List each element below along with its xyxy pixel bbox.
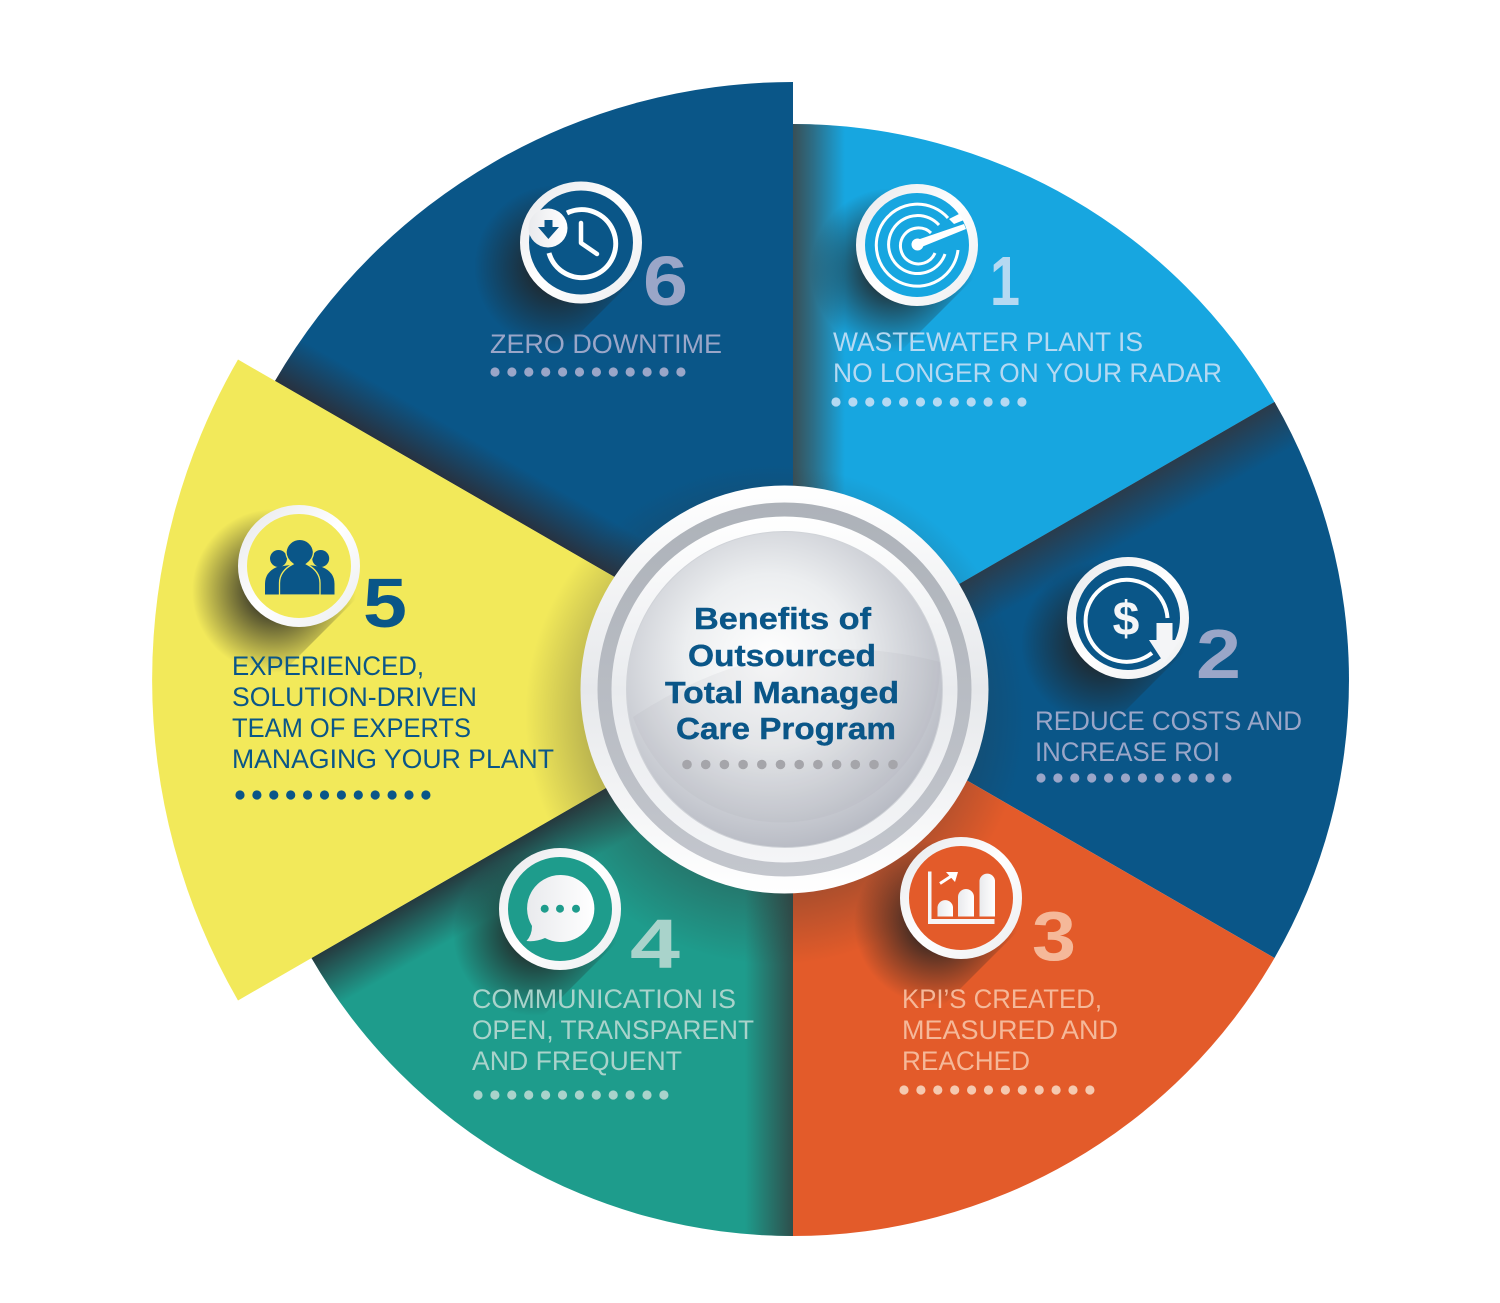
label 5 <box>232 651 554 774</box>
label 5: TEAM OF EXPERTS <box>232 713 471 743</box>
number 1: 1 <box>990 242 1020 320</box>
centre title: Total Managed <box>665 675 899 710</box>
wedge 3 <box>793 680 1274 1236</box>
dots 1 <box>831 397 1026 407</box>
panel: segment 2 reduce costs <box>959 402 1349 958</box>
label 3 <box>902 984 1118 1076</box>
label 3: KPI’S CREATED, <box>902 984 1102 1014</box>
icon: dollar with down arrow <box>1021 561 1185 725</box>
label 4: AND FREQUENT <box>472 1046 682 1076</box>
label 5: MANAGING YOUR PLANT <box>232 744 554 774</box>
centre title: Outsourced <box>688 638 876 673</box>
wedge 6 <box>275 82 793 680</box>
dots 2 <box>1036 773 1232 783</box>
panel: segment 3 KPIs <box>793 780 1274 1236</box>
label 5: SOLUTION-DRIVEN <box>232 682 477 712</box>
number 6: 6 <box>643 242 688 320</box>
centre dots <box>682 760 898 769</box>
panel: segment 4 communication <box>312 788 793 1236</box>
centre title <box>665 601 899 746</box>
disc rims <box>580 486 988 894</box>
icon: chat bubble <box>453 852 617 1016</box>
label 1: NO LONGER ON YOUR RADAR <box>833 358 1222 388</box>
wedge 4 <box>312 680 793 1236</box>
panel: segment 5 experienced team <box>152 360 614 1000</box>
number 4: 4 <box>630 905 680 983</box>
label 4: COMMUNICATION IS <box>472 984 736 1014</box>
panel: centre disc <box>580 486 988 894</box>
icon: radar <box>810 188 974 352</box>
wedge 5 <box>152 360 793 1000</box>
dots 4 <box>473 1090 668 1100</box>
centre title: Care Program <box>676 711 896 746</box>
icon: dollar with down arrow: $ <box>1113 593 1140 646</box>
label 2: INCREASE ROI <box>1035 737 1220 767</box>
dots 3 <box>899 1085 1094 1095</box>
label 6: ZERO DOWNTIME <box>490 329 722 359</box>
centre title: Benefits of <box>694 601 872 636</box>
label 3: REACHED <box>902 1046 1030 1076</box>
dots 5 <box>235 790 430 800</box>
infographic: benefits wheel <box>152 82 1349 1236</box>
icon: clock with down arrow <box>474 185 638 349</box>
wedge 1 <box>793 124 1274 680</box>
number 5: 5 <box>363 564 407 642</box>
label 2 <box>1035 706 1302 767</box>
label 1: WASTEWATER PLANT IS <box>833 327 1143 357</box>
icon: team of people <box>192 509 356 673</box>
label 2: REDUCE COSTS AND <box>1035 706 1302 736</box>
label 3: MEASURED AND <box>902 1015 1118 1045</box>
label 1 <box>833 327 1222 388</box>
label 4 <box>472 984 754 1076</box>
panel: segment 6 zero downtime <box>275 82 793 577</box>
label 4: OPEN, TRANSPARENT <box>472 1015 754 1045</box>
wedge 2 <box>793 402 1349 958</box>
number 2: 2 <box>1196 615 1241 693</box>
icon: bar chart <box>854 841 1018 1005</box>
label 5: EXPERIENCED, <box>232 651 424 681</box>
panel: segment 1 radar <box>793 124 1274 584</box>
number 3: 3 <box>1032 897 1076 975</box>
dots 6 <box>490 367 686 377</box>
